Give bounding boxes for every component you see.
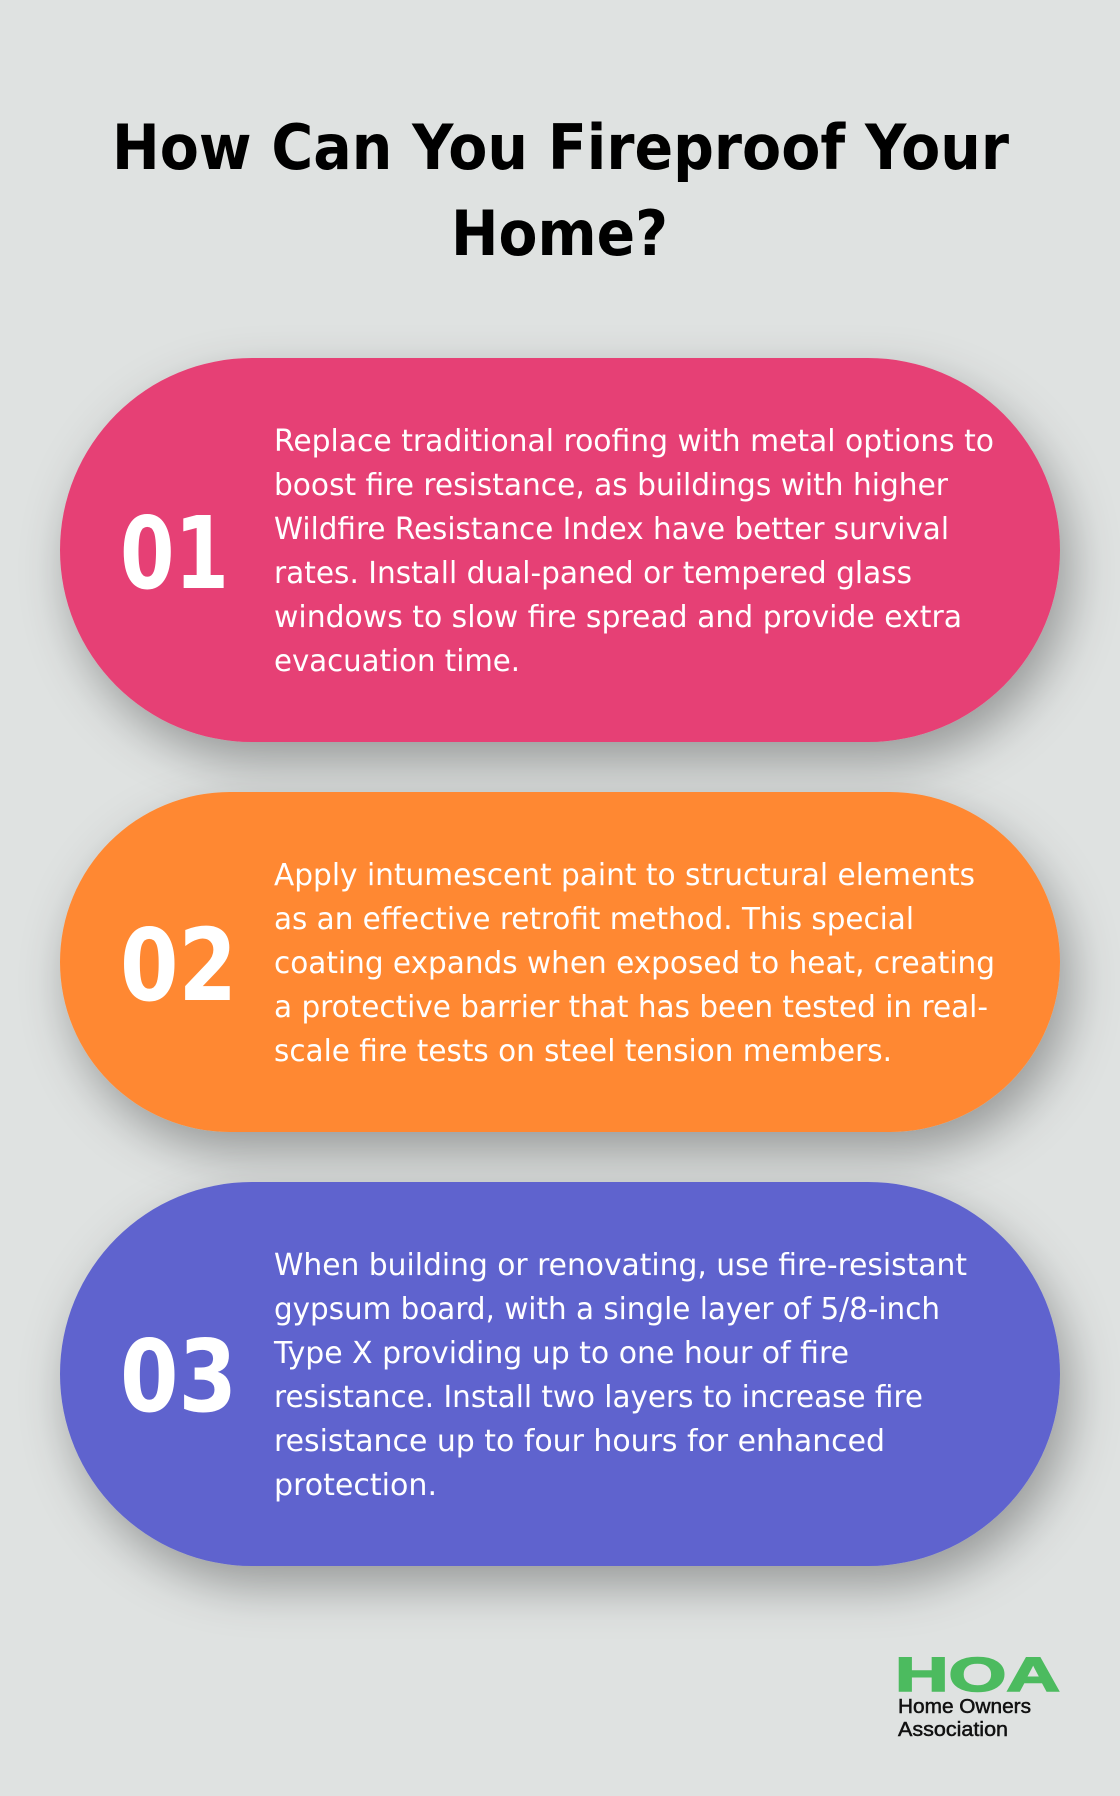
- logo: HOA Home Owners Association: HOA: [895, 1649, 1060, 1702]
- text block: step 03: gypsum board, with a single layer of 5/8-inch: [274, 1292, 940, 1327]
- step number 02: 02: [120, 907, 237, 1024]
- text block: step 02: coating expands when exposed to heat, creating: [274, 946, 995, 981]
- text block: step 03: protection.: [274, 1468, 437, 1503]
- text block: step 02: [274, 858, 995, 1069]
- panel: step 01: [60, 358, 1060, 742]
- logo: HOA Home Owners Association: Home Owners: [898, 1696, 1031, 1718]
- panel: step 02: [60, 792, 1060, 1132]
- text block: step 01: rates. Install dual-paned or tempered glass: [274, 556, 912, 591]
- pill background: purple: [60, 1182, 1060, 1566]
- text block: step 01: Replace traditional roofing with metal options to: [274, 424, 994, 459]
- text block: step 02: as an effective retrofit method. This special: [274, 902, 914, 937]
- text block: step 03: [273, 1248, 967, 1503]
- text block: step 03: resistance up to four hours for enhanced: [274, 1424, 885, 1459]
- pill background: pink: [60, 358, 1060, 742]
- text block: step 01: Wildfire Resistance Index have better survival: [274, 512, 949, 547]
- text block: step 01: boost fire resistance, as buildings with higher: [274, 468, 949, 503]
- step number 01: 01: [120, 495, 229, 612]
- text block: step 01: [274, 424, 994, 679]
- text block: step 02: scale fire tests on steel tension members.: [274, 1034, 892, 1069]
- pill background: orange: [60, 792, 1060, 1132]
- text block: step 01: evacuation time.: [274, 644, 520, 679]
- text block: step 02: a protective barrier that has been tested in real-: [274, 990, 988, 1025]
- step number 03: 03: [120, 1318, 237, 1435]
- text block: step 01: windows to slow fire spread and provide extra: [274, 600, 962, 635]
- title: [112, 111, 1009, 270]
- title: Home?: [451, 197, 668, 270]
- text block: step 03: When building or renovating, use fire-resistant: [274, 1248, 967, 1283]
- text block: step 03: Type X providing up to one hour of fire: [273, 1336, 849, 1371]
- logo: HOA Home Owners Association: [895, 1649, 1060, 1741]
- logo: HOA Home Owners Association: Association: [898, 1719, 1008, 1741]
- text block: step 02: Apply intumescent paint to structural elements: [274, 858, 975, 893]
- title: How Can You Fireproof Your: [112, 111, 1009, 184]
- text block: step 03: resistance. Install two layers to increase fire: [274, 1380, 923, 1415]
- panel: step 03: [60, 1182, 1060, 1566]
